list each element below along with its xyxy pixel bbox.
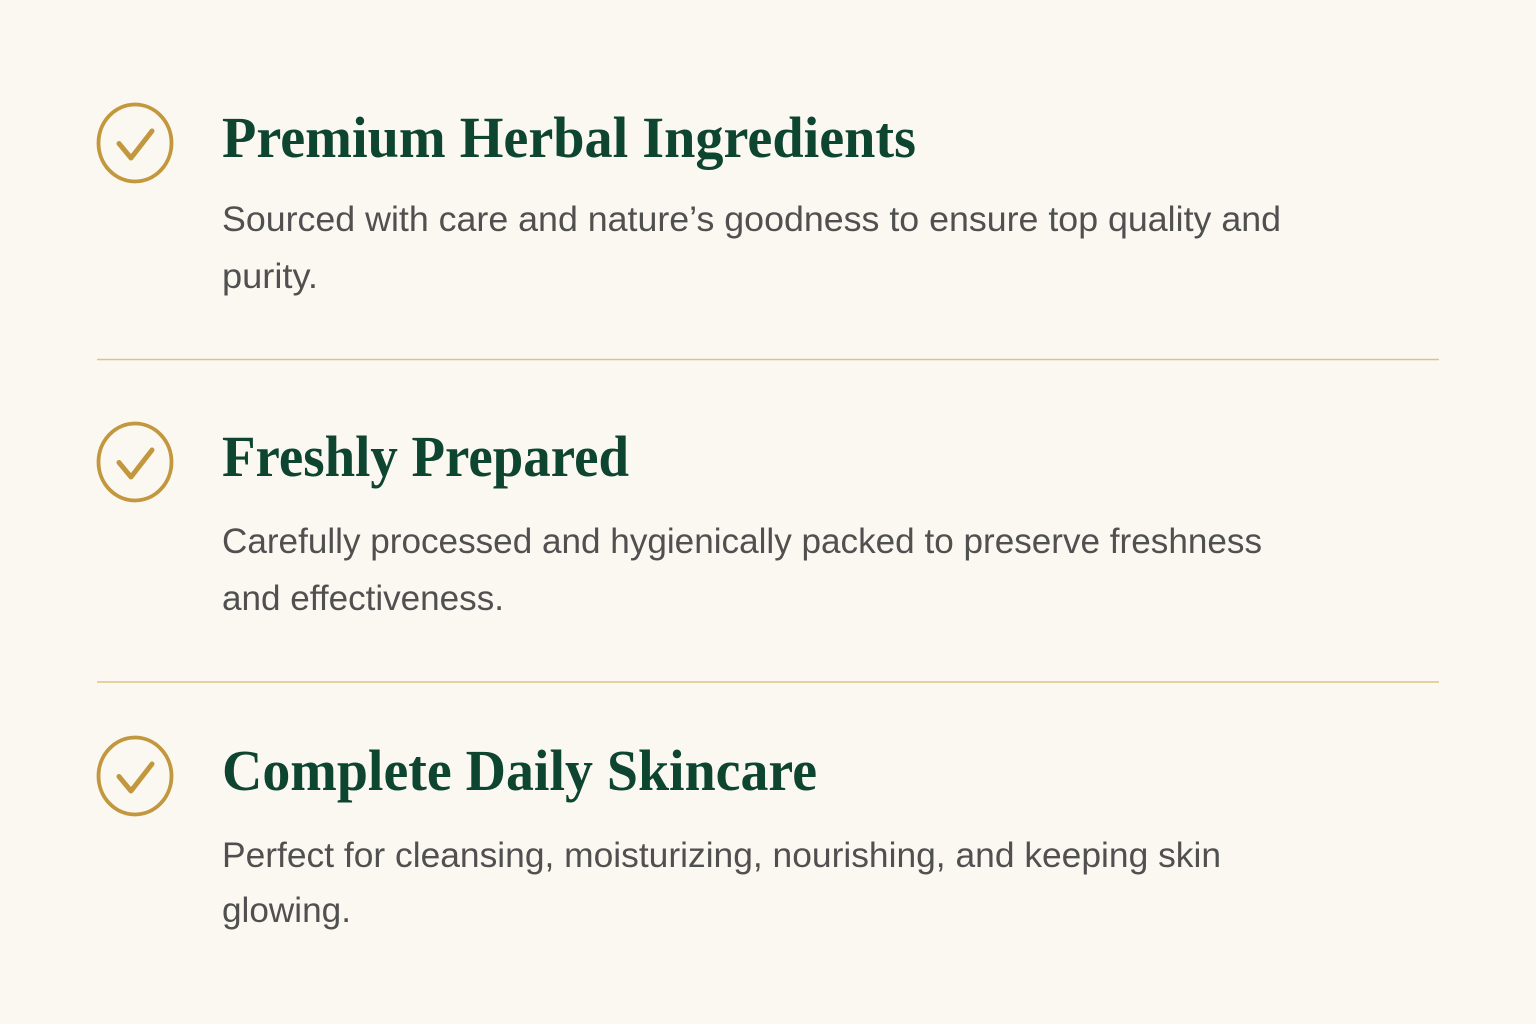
body text 2: Carefully processed and hygienically packed to preserve freshness [222, 522, 1262, 561]
body text 2 [222, 522, 1262, 618]
heading 3: Complete Daily Skincare [222, 738, 817, 803]
icon: check circle 1 [98, 104, 172, 182]
heading 2: Freshly Prepared [222, 424, 629, 489]
body text 3 [222, 836, 1221, 930]
panel: freshly prepared [98, 424, 1262, 618]
body text 2: and effectiveness. [222, 579, 504, 618]
icon: check circle 3 [98, 738, 172, 814]
body text 1: purity. [222, 257, 318, 296]
heading 1: Premium Herbal Ingredients [222, 105, 916, 170]
panel: complete daily skincare [98, 738, 1221, 930]
icon: check circle 2 [98, 424, 172, 500]
body text 3: glowing. [222, 891, 351, 930]
panel: premium herbal ingredients [98, 104, 1281, 296]
body text 3: Perfect for cleansing, moisturizing, nourishing, and keeping skin [222, 836, 1221, 875]
body text 1 [222, 200, 1281, 296]
body text 1: Sourced with care and nature’s goodness to ensure top quality and [222, 200, 1281, 239]
